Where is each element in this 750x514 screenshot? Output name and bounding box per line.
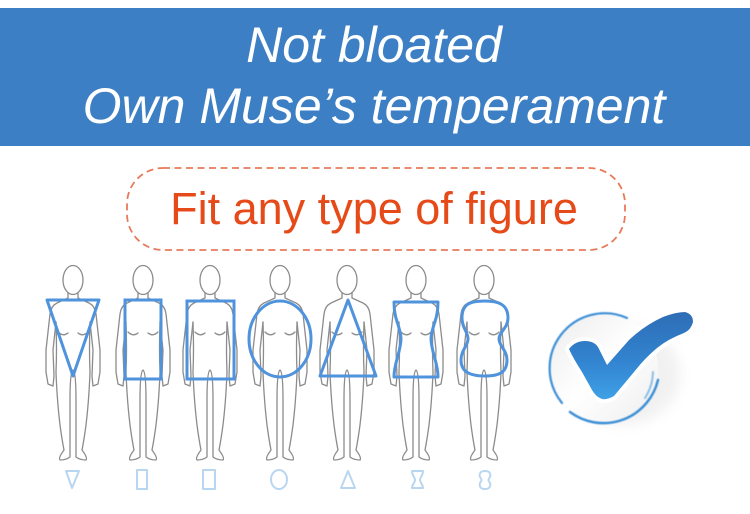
figure 1: inverted triangle <box>46 266 100 460</box>
icon: hourglass <box>412 471 423 488</box>
figure 5: triangle <box>320 266 376 460</box>
header banner <box>0 8 750 146</box>
badge blue arcs <box>550 313 658 423</box>
header title <box>83 17 667 134</box>
body figures row <box>46 266 511 460</box>
icon: wide rectangle <box>203 470 215 489</box>
icon: inverted triangle <box>66 471 79 488</box>
figure 2: narrow rectangle <box>116 266 170 460</box>
badge shadow <box>564 325 680 425</box>
figure 6: hourglass <box>389 266 443 460</box>
header title: Not bloated <box>246 17 504 73</box>
icon: figure eight <box>480 471 490 489</box>
icon: check mark badge <box>550 312 693 425</box>
icon: triangle <box>341 471 355 488</box>
figure 4: circle <box>249 266 311 460</box>
icon: circle <box>271 470 287 489</box>
figure 3: wide rectangle <box>183 266 237 460</box>
icon: narrow rectangle <box>137 470 147 489</box>
badge disc <box>550 314 658 422</box>
header title: Own Muse’s temperament <box>83 78 667 134</box>
callout: fit any type of figure: Fit any type of figure <box>170 183 578 234</box>
figure 7: figure eight <box>457 266 511 460</box>
check mark <box>569 312 693 399</box>
small shape icons row <box>66 470 490 489</box>
callout: fit any type of figure <box>127 168 625 250</box>
